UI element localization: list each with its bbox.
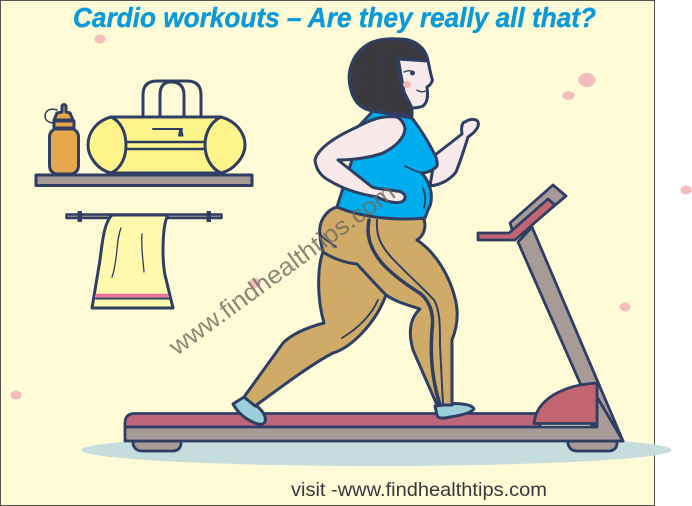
blue top (337, 111, 437, 219)
towel rail (66, 212, 222, 222)
treadmill console (510, 185, 566, 232)
right shoe (435, 404, 474, 418)
treadmill belt (125, 414, 540, 427)
floor shadow (82, 434, 672, 466)
treadmill base (125, 397, 623, 441)
towel (92, 215, 173, 308)
footer website text: visit -www.findhealthtips.com (291, 479, 547, 501)
towel on rail (66, 212, 222, 308)
face (398, 58, 432, 108)
trousers (244, 207, 457, 406)
eye (404, 70, 415, 76)
front arm (430, 119, 478, 186)
watermark: www.findhealthtips.com (163, 178, 401, 361)
icon: water bottle (45, 104, 78, 174)
title: Cardio workouts – Are they really all that? (73, 2, 596, 33)
decorative pink dots (10, 34, 692, 400)
shelf board (36, 175, 252, 186)
treadmill feet (133, 441, 181, 451)
shelf with bottle and bag (36, 81, 252, 186)
left shoe (233, 397, 265, 424)
rear arm (315, 117, 405, 203)
hair (349, 39, 428, 116)
runner (233, 39, 478, 424)
treadmill upright (518, 227, 623, 441)
motor cover (534, 383, 597, 424)
cheek (403, 81, 411, 88)
smile (417, 90, 426, 92)
treadmill (125, 185, 623, 451)
icon: gym bag (88, 81, 245, 173)
